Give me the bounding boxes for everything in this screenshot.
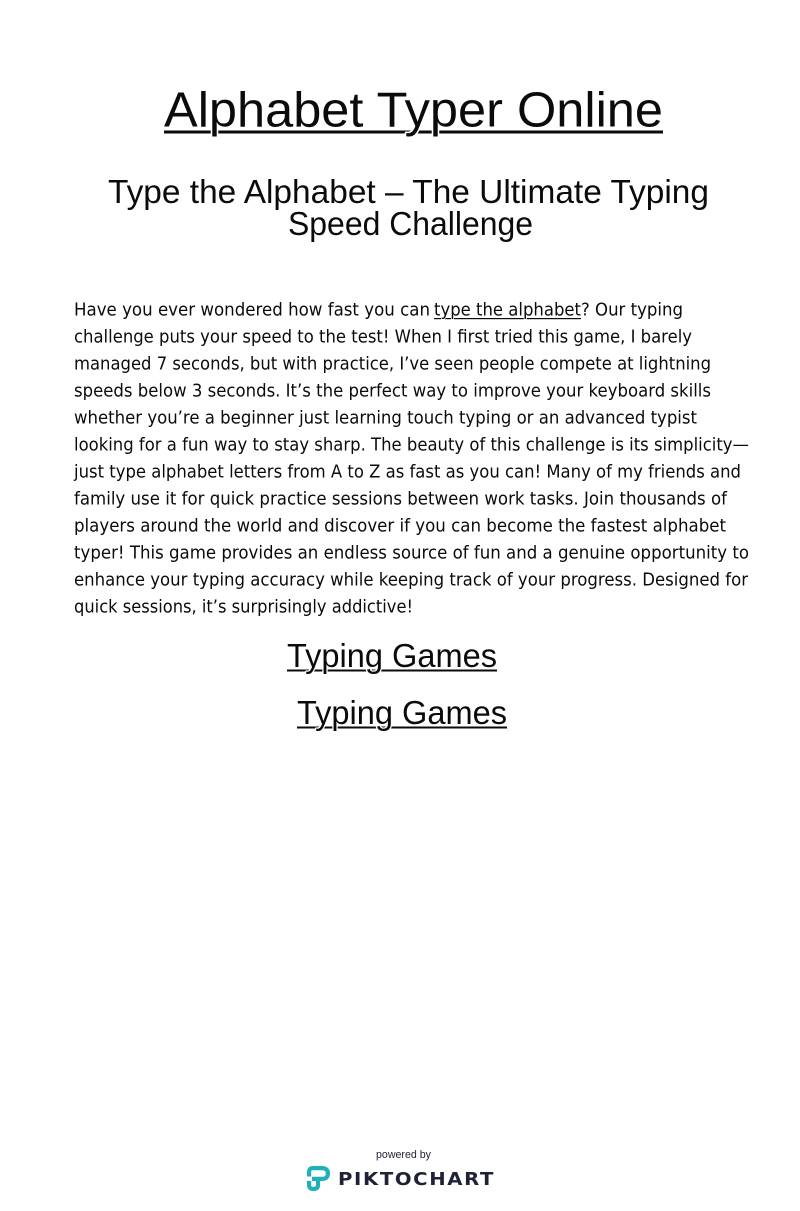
body paragraph: players around the world and discover if you can become the fastest alphabet [74, 516, 726, 536]
body paragraph: challenge puts your speed to the test! When I first tried this game, I barely [74, 328, 692, 348]
powered by piktochart logo [309, 1149, 495, 1190]
subtitle heading: Type the Alphabet – The Ultimate Typing [108, 174, 709, 211]
body paragraph [73, 300, 749, 618]
subtitle heading [108, 174, 709, 243]
body paragraph: looking for a fun way to stay sharp. The beauty of this challenge is its simplicity— [74, 436, 749, 456]
body paragraph: type the alphabet [434, 300, 581, 320]
body paragraph: quick sessions, it’s surprisingly addictive! [74, 598, 413, 618]
body paragraph: speeds below 3 seconds. It’s the perfect way to improve your keyboard skills [74, 382, 711, 402]
title: Alphabet Typer Online [164, 82, 663, 138]
powered by piktochart logo: powered by [376, 1149, 431, 1161]
subtitle heading: Speed Challenge [288, 206, 533, 243]
link: typing games 2: Typing Games [297, 695, 507, 732]
body paragraph: ? Our typing [581, 300, 683, 320]
body paragraph: family use it for quick practice sessions between work tasks. Join thousands of [74, 490, 728, 510]
wordmark: PIKTOCHART [338, 1169, 495, 1190]
icon: piktochart mark [309, 1168, 328, 1189]
link: typing games 1: Typing Games [287, 638, 497, 675]
body paragraph: just type alphabet letters from A to Z as fast as you can! Many of my friends and [73, 462, 741, 482]
body paragraph: enhance your typing accuracy while keeping track of your progress. Designed for [74, 570, 749, 590]
body paragraph: Have you ever wondered how fast you can [74, 300, 430, 320]
body paragraph: typer! This game provides an endless source of fun and a genuine opportunity to [74, 544, 749, 564]
body paragraph: managed 7 seconds, but with practice, I’ve seen people compete at lightning [74, 354, 711, 374]
body paragraph: whether you’re a beginner just learning touch typing or an advanced typist [74, 408, 697, 428]
